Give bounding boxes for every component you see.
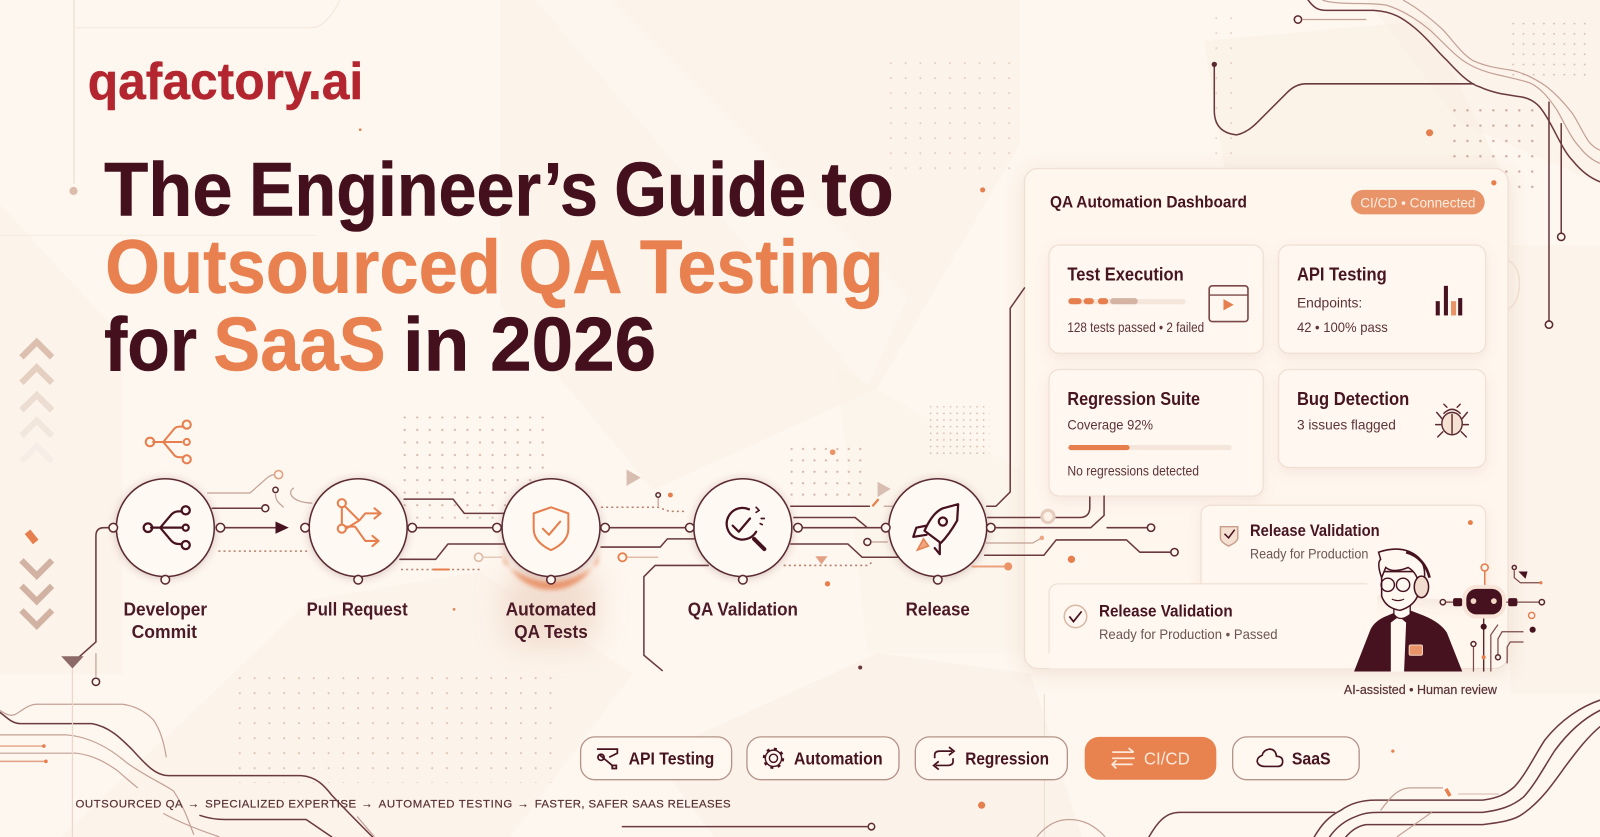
tagline: SPECIALIZED EXPERTISE xyxy=(205,798,357,810)
pipeline connectors xyxy=(61,449,898,837)
card: Regression Suite xyxy=(1049,370,1263,496)
card: Release Validation (back): Ready for Production xyxy=(1250,546,1368,561)
tagline: OUTSOURCED QA xyxy=(76,798,183,810)
illustration: robot xyxy=(1440,564,1544,672)
icon: play window xyxy=(1209,286,1248,322)
title: QA xyxy=(518,225,622,310)
icon: floating branch above commit xyxy=(146,421,191,463)
chip: CI/CD (active) xyxy=(1085,737,1216,780)
card: API Testing xyxy=(1279,245,1486,353)
panel: QA Automation Dashboard xyxy=(1024,168,1519,668)
title: Testing xyxy=(640,225,884,310)
step: Release xyxy=(881,479,995,619)
circuit traces top right xyxy=(359,0,1600,328)
step: Automated QA Tests: Automated xyxy=(506,598,596,619)
tagline: → xyxy=(517,798,529,810)
title: for xyxy=(104,303,197,388)
card: API Testing: API Testing xyxy=(1297,264,1387,285)
title: Engineer’s xyxy=(249,147,598,232)
chip: SaaS xyxy=(1233,737,1359,780)
title: Guide xyxy=(614,147,806,232)
step: Pull Request: Pull Request xyxy=(307,598,408,619)
step: QA Validation xyxy=(686,479,802,619)
step: Pull Request xyxy=(301,479,417,619)
card: Regression Suite: No regressions detected xyxy=(1067,464,1199,479)
title: Outsourced xyxy=(105,225,501,310)
illustration: engineer with headset xyxy=(1354,549,1462,672)
title: to xyxy=(821,147,894,232)
title: SaaS xyxy=(213,303,386,388)
logo: qafactory.ai xyxy=(88,53,363,111)
card: Regression Suite: Regression Suite xyxy=(1067,388,1200,409)
circuit traces bottom right xyxy=(622,700,1600,837)
tagline xyxy=(76,798,731,810)
chip: Regression xyxy=(915,737,1067,780)
step: Developer Commit: Commit xyxy=(132,621,198,642)
dot grids xyxy=(227,10,1591,783)
card: Release Validation (front) xyxy=(1049,584,1378,668)
step: Developer Commit xyxy=(109,479,225,642)
chip: CI/CD (active): CI/CD xyxy=(1144,748,1190,768)
card: Regression Suite: Coverage 92% xyxy=(1067,418,1153,433)
tagline: → xyxy=(361,798,373,810)
tagline: → xyxy=(188,798,199,810)
chip: API Testing: API Testing xyxy=(629,748,714,768)
icon: bar chart xyxy=(1436,286,1462,315)
decorative chevrons xyxy=(21,342,52,626)
chip: SaaS: SaaS xyxy=(1292,748,1331,768)
card: Release Validation (front): Release Validation xyxy=(1099,601,1233,620)
status pill xyxy=(1351,190,1485,214)
card: Test Execution xyxy=(1049,245,1263,353)
card: Test Execution: Test Execution xyxy=(1067,264,1184,285)
step: Automated QA Tests: QA Tests xyxy=(514,621,588,642)
step: Release: Release xyxy=(906,598,970,619)
card: Release Validation (front): Ready for Production • Passed xyxy=(1099,627,1278,642)
caption: AI-assisted • Human review xyxy=(1344,682,1497,697)
left feed trace xyxy=(78,528,110,658)
dashboard heading: QA Automation Dashboard xyxy=(1050,192,1247,211)
card: Bug Detection xyxy=(1279,370,1486,467)
step: Developer Commit: Developer xyxy=(123,598,208,619)
chip: Regression: Regression xyxy=(965,748,1049,768)
circuit traces bottom left xyxy=(0,704,374,837)
title: in 2026 xyxy=(403,303,656,388)
card: Bug Detection: 3 issues flagged xyxy=(1297,418,1396,433)
card: Bug Detection: Bug Detection xyxy=(1297,388,1409,409)
status pill: CI/CD • Connected xyxy=(1360,195,1476,210)
step: QA Validation: QA Validation xyxy=(688,598,798,619)
chip: Automation xyxy=(747,737,899,780)
card: API Testing: Endpoints: xyxy=(1297,295,1362,310)
title: The xyxy=(104,147,233,232)
card: API Testing: 42 • 100% pass xyxy=(1297,320,1388,335)
tagline: AUTOMATED TESTING xyxy=(379,798,512,810)
card: Test Execution: 128 tests passed • 2 failed xyxy=(1067,320,1204,335)
card: Release Validation (back) xyxy=(1201,505,1486,602)
chip: API Testing xyxy=(581,737,732,780)
release output traces over panel xyxy=(972,288,1178,571)
chip: Automation: Automation xyxy=(794,748,883,768)
tagline: FASTER, SAFER SAAS RELEASES xyxy=(535,798,731,810)
title xyxy=(104,147,894,388)
icon: bug xyxy=(1436,404,1468,437)
card: Release Validation (back): Release Validation xyxy=(1250,521,1380,540)
step: Automated QA Tests xyxy=(493,479,609,646)
